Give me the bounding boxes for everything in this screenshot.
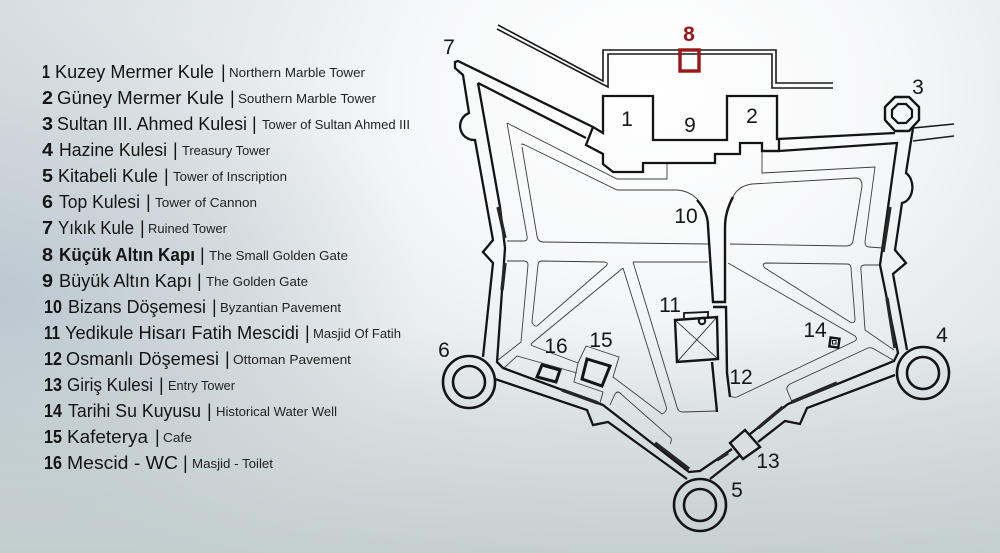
legend item 3: Sultan III. Ahmed Kulesi <box>57 114 247 134</box>
legend item 14: 14 <box>44 401 62 421</box>
legend item 16: | <box>183 453 188 473</box>
legend item 12 <box>44 349 352 369</box>
map number labels: 1 <box>621 108 633 131</box>
legend item 16: Mescid - WC <box>67 453 178 473</box>
legend item 2: | <box>230 88 235 108</box>
legend item 3 <box>42 114 410 134</box>
map number labels: 15 <box>589 329 613 352</box>
legend item 12: | <box>225 349 230 369</box>
mosque 11 <box>675 312 718 362</box>
map number labels: 9 <box>684 114 696 137</box>
legend item 6: | <box>146 192 151 212</box>
legend item 1 <box>42 62 365 82</box>
legend item 14: Tarihi Su Kuyusu <box>68 401 201 421</box>
map number labels: 11 <box>659 294 681 317</box>
tower 5 <box>674 479 726 531</box>
legend item 6: Tower of Cannon <box>155 196 257 210</box>
legend item 9: Büyük Altın Kapı <box>59 271 192 291</box>
legend item 2 <box>42 88 376 108</box>
legend item 7: | <box>140 218 145 238</box>
map number labels <box>438 23 948 502</box>
legend item 9: | <box>197 271 202 291</box>
thick wall sections <box>498 207 895 469</box>
legend item 9: 9 <box>42 271 53 291</box>
legend item 6: 6 <box>42 192 53 212</box>
entry tower 13 <box>730 430 760 459</box>
map number labels: 4 <box>936 324 948 347</box>
map number labels: 16 <box>544 335 568 358</box>
legend item 10: Bizans Döşemesi <box>68 297 206 317</box>
legend item 8: Küçük Altın Kapı <box>59 245 195 265</box>
legend item 13: Giriş Kulesi <box>67 375 153 395</box>
castle plan <box>443 25 954 531</box>
legend item 3: | <box>252 114 257 134</box>
legend item 7: Ruined Tower <box>148 222 227 236</box>
legend item 5: | <box>164 166 169 186</box>
tower 6 <box>443 356 495 408</box>
legend item 10: | <box>212 297 217 317</box>
building 16 <box>537 365 560 382</box>
tower 4 <box>897 347 949 399</box>
legend item 14 <box>44 401 337 421</box>
outer road double line <box>497 25 833 88</box>
legend list <box>42 62 410 473</box>
legend item 11: Yedikule Hisarı Fatih Mescidi <box>65 323 299 343</box>
legend item 4: | <box>173 140 178 160</box>
legend item 1: Kuzey Mermer Kule <box>55 62 214 82</box>
legend item 2: 2 <box>42 88 53 108</box>
map number labels: 14 <box>803 319 827 342</box>
legend item 4: Treasury Tower <box>182 144 270 158</box>
legend item 3: 3 <box>42 114 53 134</box>
legend item 11: | <box>305 323 310 343</box>
legend item 13: Entry Tower <box>168 379 235 393</box>
map number labels: 6 <box>438 339 450 362</box>
legend item 6: Top Kulesi <box>59 192 140 212</box>
legend item 12: Ottoman Pavement <box>233 353 352 367</box>
well 14 <box>829 337 840 348</box>
legend item 14: | <box>207 401 212 421</box>
legend item 3: Tower of Sultan Ahmed III <box>262 118 410 132</box>
pavement lines 10 and 12 <box>697 197 733 412</box>
legend item 15: 15 <box>44 427 62 447</box>
legend item 11 <box>44 323 401 343</box>
legend item 12: Osmanlı Döşemesi <box>66 349 219 369</box>
castle walls <box>455 61 954 479</box>
legend item 11: Masjid Of Fatih <box>313 327 401 341</box>
legend item 12: 12 <box>44 349 62 369</box>
legend item 5 <box>42 166 287 186</box>
legend item 11: 11 <box>44 323 60 343</box>
map number labels: 13 <box>756 450 780 473</box>
legend item 1: | <box>221 62 226 82</box>
legend item 16: Masjid - Toilet <box>192 457 274 471</box>
map number labels: 2 <box>746 105 758 128</box>
legend item 7: Yıkık Kule <box>58 218 134 238</box>
legend item 14: Historical Water Well <box>216 405 337 419</box>
legend item 10 <box>44 297 342 317</box>
map number labels: 3 <box>912 76 924 99</box>
small golden gate marker <box>680 50 699 71</box>
legend item 8: | <box>200 245 205 265</box>
legend item 5: Kitabeli Kule <box>58 166 158 186</box>
map number labels: 5 <box>731 479 743 502</box>
legend item 16: 16 <box>44 453 62 473</box>
legend item 1: 1 <box>42 62 50 82</box>
legend item 8: 8 <box>42 245 53 265</box>
legend item 13: | <box>159 375 164 395</box>
building 15 <box>582 359 610 386</box>
map number labels: 8 <box>683 23 695 46</box>
legend item 10: 10 <box>44 297 62 317</box>
legend item 16 <box>44 453 274 473</box>
legend item 2: Southern Marble Tower <box>238 92 376 106</box>
legend item 2: Güney Mermer Kule <box>57 88 224 108</box>
legend item 4: 4 <box>42 140 53 160</box>
map number labels: 12 <box>729 366 753 389</box>
legend item 5: Tower of Inscription <box>173 170 287 184</box>
map number labels: 7 <box>443 36 455 59</box>
legend item 9 <box>42 271 308 291</box>
legend item 5: 5 <box>42 166 53 186</box>
legend item 9: The Golden Gate <box>206 275 308 289</box>
tower 3 <box>885 97 919 131</box>
legend item 4: Hazine Kulesi <box>59 140 167 160</box>
garden paths <box>498 123 894 444</box>
map number labels: 10 <box>674 205 698 228</box>
legend item 1: Northern Marble Tower <box>229 66 365 80</box>
legend item 15: Cafe <box>163 431 192 445</box>
legend item 15: | <box>155 427 160 447</box>
legend item 13 <box>44 375 235 395</box>
legend item 4 <box>42 140 270 160</box>
legend item 13: 13 <box>44 375 62 395</box>
legend item 15: Kafeterya <box>67 427 149 447</box>
legend item 15 <box>44 427 192 447</box>
legend item 7: 7 <box>42 218 53 238</box>
legend item 8 <box>42 245 348 265</box>
legend item 7 <box>42 218 227 238</box>
legend item 8: The Small Golden Gate <box>209 249 348 263</box>
legend item 6 <box>42 192 257 212</box>
legend item 10: Byzantian Pavement <box>220 301 342 315</box>
